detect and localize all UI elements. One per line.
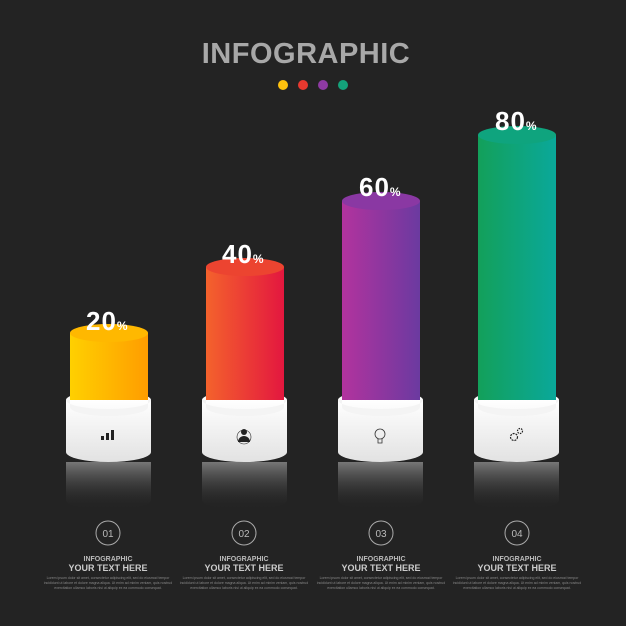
step 03 text: INFOGRAPHIC [356, 556, 406, 563]
step 02 text: INFOGRAPHIC [220, 556, 268, 563]
icon: bulb [375, 429, 385, 443]
step 03 text: YOUR TEXT HERE [341, 563, 421, 573]
step 03 text: incididunt ut labore et dolore magna aliqua. Ut enim ad minim veniam, quis nostrud [317, 581, 445, 585]
step 03 text: Lorem ipsum dolor sit amet, consectetur adipiscing elit, sed do eiusmod tempor [320, 576, 443, 580]
bar 1: 20% [66, 306, 151, 510]
step 04 text: INFOGRAPHIC [492, 556, 542, 563]
step 01 text: 01 [102, 529, 114, 540]
step 03 text: exercitation ullamco laboris nisi ut aliquip ex ea commodo consequat. [327, 586, 435, 590]
step 04 text: incididunt ut labore et dolore magna aliqua. Ut enim ad minim veniam, quis nostrud [453, 581, 581, 585]
step 04 text: exercitation ullamco laboris nisi ut aliquip ex ea commodo consequat. [463, 586, 571, 590]
step 04 text: Lorem ipsum dolor sit amet, consectetur adipiscing elit, sed do eiusmod tempor [456, 576, 579, 580]
title: INFOGRAPHIC [202, 38, 410, 70]
step 03 text [317, 521, 445, 590]
bar 3: 60% [338, 172, 423, 510]
step 04 text [453, 521, 581, 590]
step 03 text: 03 [375, 529, 387, 540]
label 40%: 40% [222, 239, 265, 269]
step 02 text: Lorem ipsum dolor sit amet, consectetur adipiscing elit, sed do eiusmod tempor [183, 576, 306, 580]
label 60%: 60% [359, 172, 402, 202]
step 04 text: 04 [511, 529, 523, 540]
step 01 text [44, 521, 172, 590]
step 02 text: exercitation ullamco laboris nisi ut aliquip ex ea commodo consequat. [190, 586, 298, 590]
step 02 text: YOUR TEXT HERE [204, 563, 284, 573]
step 02 text [180, 521, 308, 590]
step 04 text: YOUR TEXT HERE [477, 563, 557, 573]
bar 2: 40% [202, 239, 287, 510]
step 01 text: incididunt ut labore et dolore magna aliqua. Ut enim ad minim veniam, quis nostrud [44, 581, 172, 585]
step 01 text: INFOGRAPHIC [84, 556, 132, 563]
icon: bar chart [101, 430, 114, 440]
step 02 text: 02 [238, 529, 250, 540]
icon: gears [510, 428, 522, 440]
color dots [278, 80, 348, 90]
step 01 text: YOUR TEXT HERE [68, 563, 148, 573]
icon: person [237, 429, 251, 444]
step 02 text: incididunt ut labore et dolore magna aliqua. Ut enim ad minim veniam, quis nostrud [180, 581, 308, 585]
step 01 text: Lorem ipsum dolor sit amet, consectetur adipiscing elit, sed do eiusmod tempor [47, 576, 170, 580]
bar 4: 80% [474, 106, 559, 510]
label 80%: 80% [495, 106, 538, 136]
label 20%: 20% [86, 306, 129, 336]
step 01 text: exercitation ullamco laboris nisi ut aliquip ex ea commodo consequat. [54, 586, 162, 590]
